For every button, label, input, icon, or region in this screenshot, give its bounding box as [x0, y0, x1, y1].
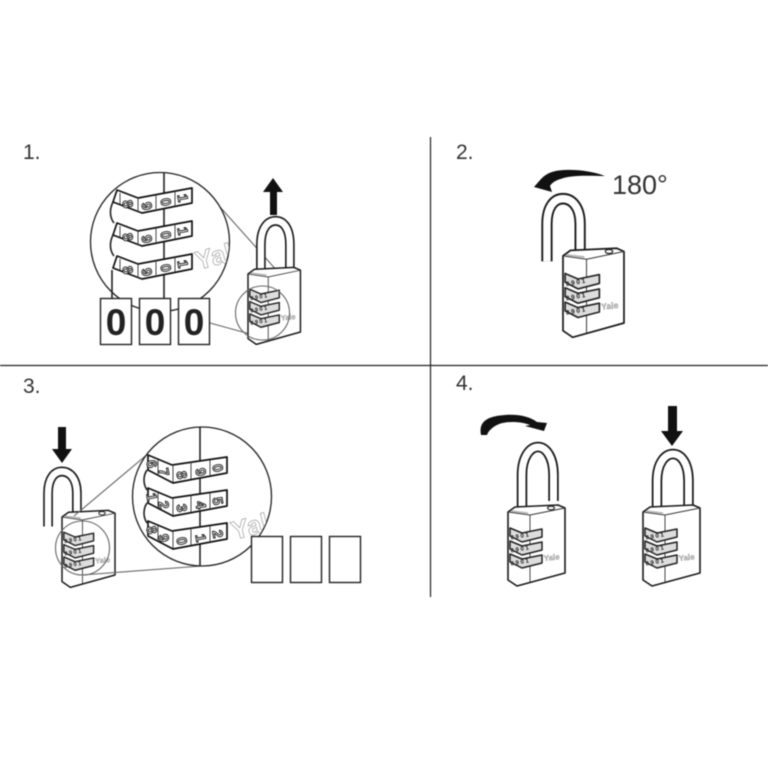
- step number 2: 2.: [456, 141, 474, 164]
- magnified dials: 4: [192, 500, 210, 510]
- magnified dials: 2: [155, 500, 173, 510]
- padlock closed, raised: 8 9 0 1: [250, 306, 268, 315]
- magnified dials: 8: [119, 232, 137, 242]
- magnified dials: [90, 172, 236, 312]
- padlock open, shackle rotated: 8 9 0 1: [565, 292, 586, 303]
- padlock closed, raised: Yale: [280, 312, 296, 323]
- magnified dials: 9: [192, 467, 210, 477]
- padlock closed, raised: [248, 221, 300, 344]
- padlock closed: 8 9 0 1: [645, 558, 665, 568]
- magnified dials: 1: [174, 193, 192, 203]
- padlock raised, shackle aligned: 8 9 0 1: [510, 532, 530, 542]
- padlock open, shackle rotated: 8 9 0 1: [64, 549, 82, 558]
- magnified dials: 8: [173, 470, 191, 480]
- magnified dials: 0: [157, 263, 175, 273]
- arrow: push down: [52, 427, 72, 463]
- magnified dials: 0: [157, 230, 175, 240]
- magnified dials: 1: [192, 533, 210, 543]
- padlock open, shackle rotated: [48, 471, 115, 587]
- magnified dials: 8: [143, 525, 161, 535]
- magnified dials: 9: [155, 533, 173, 543]
- magnified dials: 0: [157, 197, 175, 207]
- arrow: rotate back: [481, 415, 547, 435]
- zoom connector lines: [74, 453, 202, 575]
- padlock open, shackle rotated: 8 9 0 1: [565, 278, 586, 288]
- padlock closed, raised: 8 9 0 1: [250, 318, 268, 327]
- padlock raised, shackle aligned: [508, 447, 565, 586]
- magnified dials: 9: [138, 234, 156, 244]
- code boxes 000: 0: [106, 302, 126, 343]
- padlock closed: Yale: [678, 552, 696, 563]
- small zoom circle: [236, 286, 290, 340]
- magnified dials: 6: [143, 459, 161, 469]
- padlock open, shackle rotated: 8 9 0 1: [565, 306, 586, 317]
- padlock closed: 8 9 0 1: [645, 532, 665, 542]
- code boxes 000: [100, 298, 210, 344]
- padlock open, shackle rotated: Yale: [95, 555, 110, 566]
- magnified dials: 8: [119, 265, 137, 275]
- padlock open, shackle rotated: Yale: [601, 300, 619, 312]
- magnified dials: 9: [138, 267, 156, 277]
- padlock open, shackle rotated: 8 9 0 1: [64, 561, 82, 570]
- arrow: rotate 180: [534, 170, 605, 192]
- magnified dials: Yal: [228, 507, 272, 546]
- padlock closed: [643, 454, 700, 586]
- label 180 degrees: 180°: [612, 170, 668, 200]
- step number 1: 1.: [23, 141, 41, 164]
- code boxes 000: 0: [145, 302, 165, 343]
- magnified dials: [132, 427, 272, 566]
- magnified dials: 1: [174, 226, 192, 236]
- magnified dials: 2: [209, 529, 227, 539]
- padlock raised, shackle aligned: 8 9 0 1: [510, 545, 530, 555]
- arrow: pull up: [263, 178, 283, 215]
- padlock raised, shackle aligned: Yale: [543, 552, 561, 563]
- padlock closed: 8 9 0 1: [645, 545, 665, 555]
- small zoom circle: [56, 521, 110, 575]
- magnified dials: 3: [173, 503, 191, 513]
- magnified dials: 8: [119, 199, 137, 209]
- arrow: push down: [661, 406, 683, 446]
- step number 3: 3.: [23, 375, 41, 398]
- magnified dials: 0: [173, 536, 191, 546]
- panel: step 4: [456, 372, 700, 586]
- code boxes 000: 0: [184, 302, 204, 343]
- padlock open, shackle rotated: [547, 199, 624, 337]
- magnified dials: 1: [174, 259, 192, 269]
- magnified dials: Yal: [192, 237, 236, 276]
- magnified dials: 7: [155, 467, 173, 477]
- panel: step 2: [456, 141, 668, 337]
- step number 4: 4.: [456, 372, 474, 395]
- padlock open, shackle rotated: 8 9 0 1: [64, 536, 82, 545]
- panel: step 1: [23, 141, 300, 344]
- panel: step 3: [23, 375, 360, 587]
- magnified dials: 0: [209, 463, 227, 473]
- magnified dials: 9: [138, 201, 156, 211]
- padlock raised, shackle aligned: 8 9 0 1: [510, 558, 530, 568]
- zoom connector lines: [210, 207, 287, 334]
- magnified dials: 1: [143, 492, 161, 502]
- empty code boxes: [252, 536, 360, 582]
- magnified dials: 5: [209, 496, 227, 506]
- padlock closed, raised: 8 9 0 1: [250, 293, 268, 302]
